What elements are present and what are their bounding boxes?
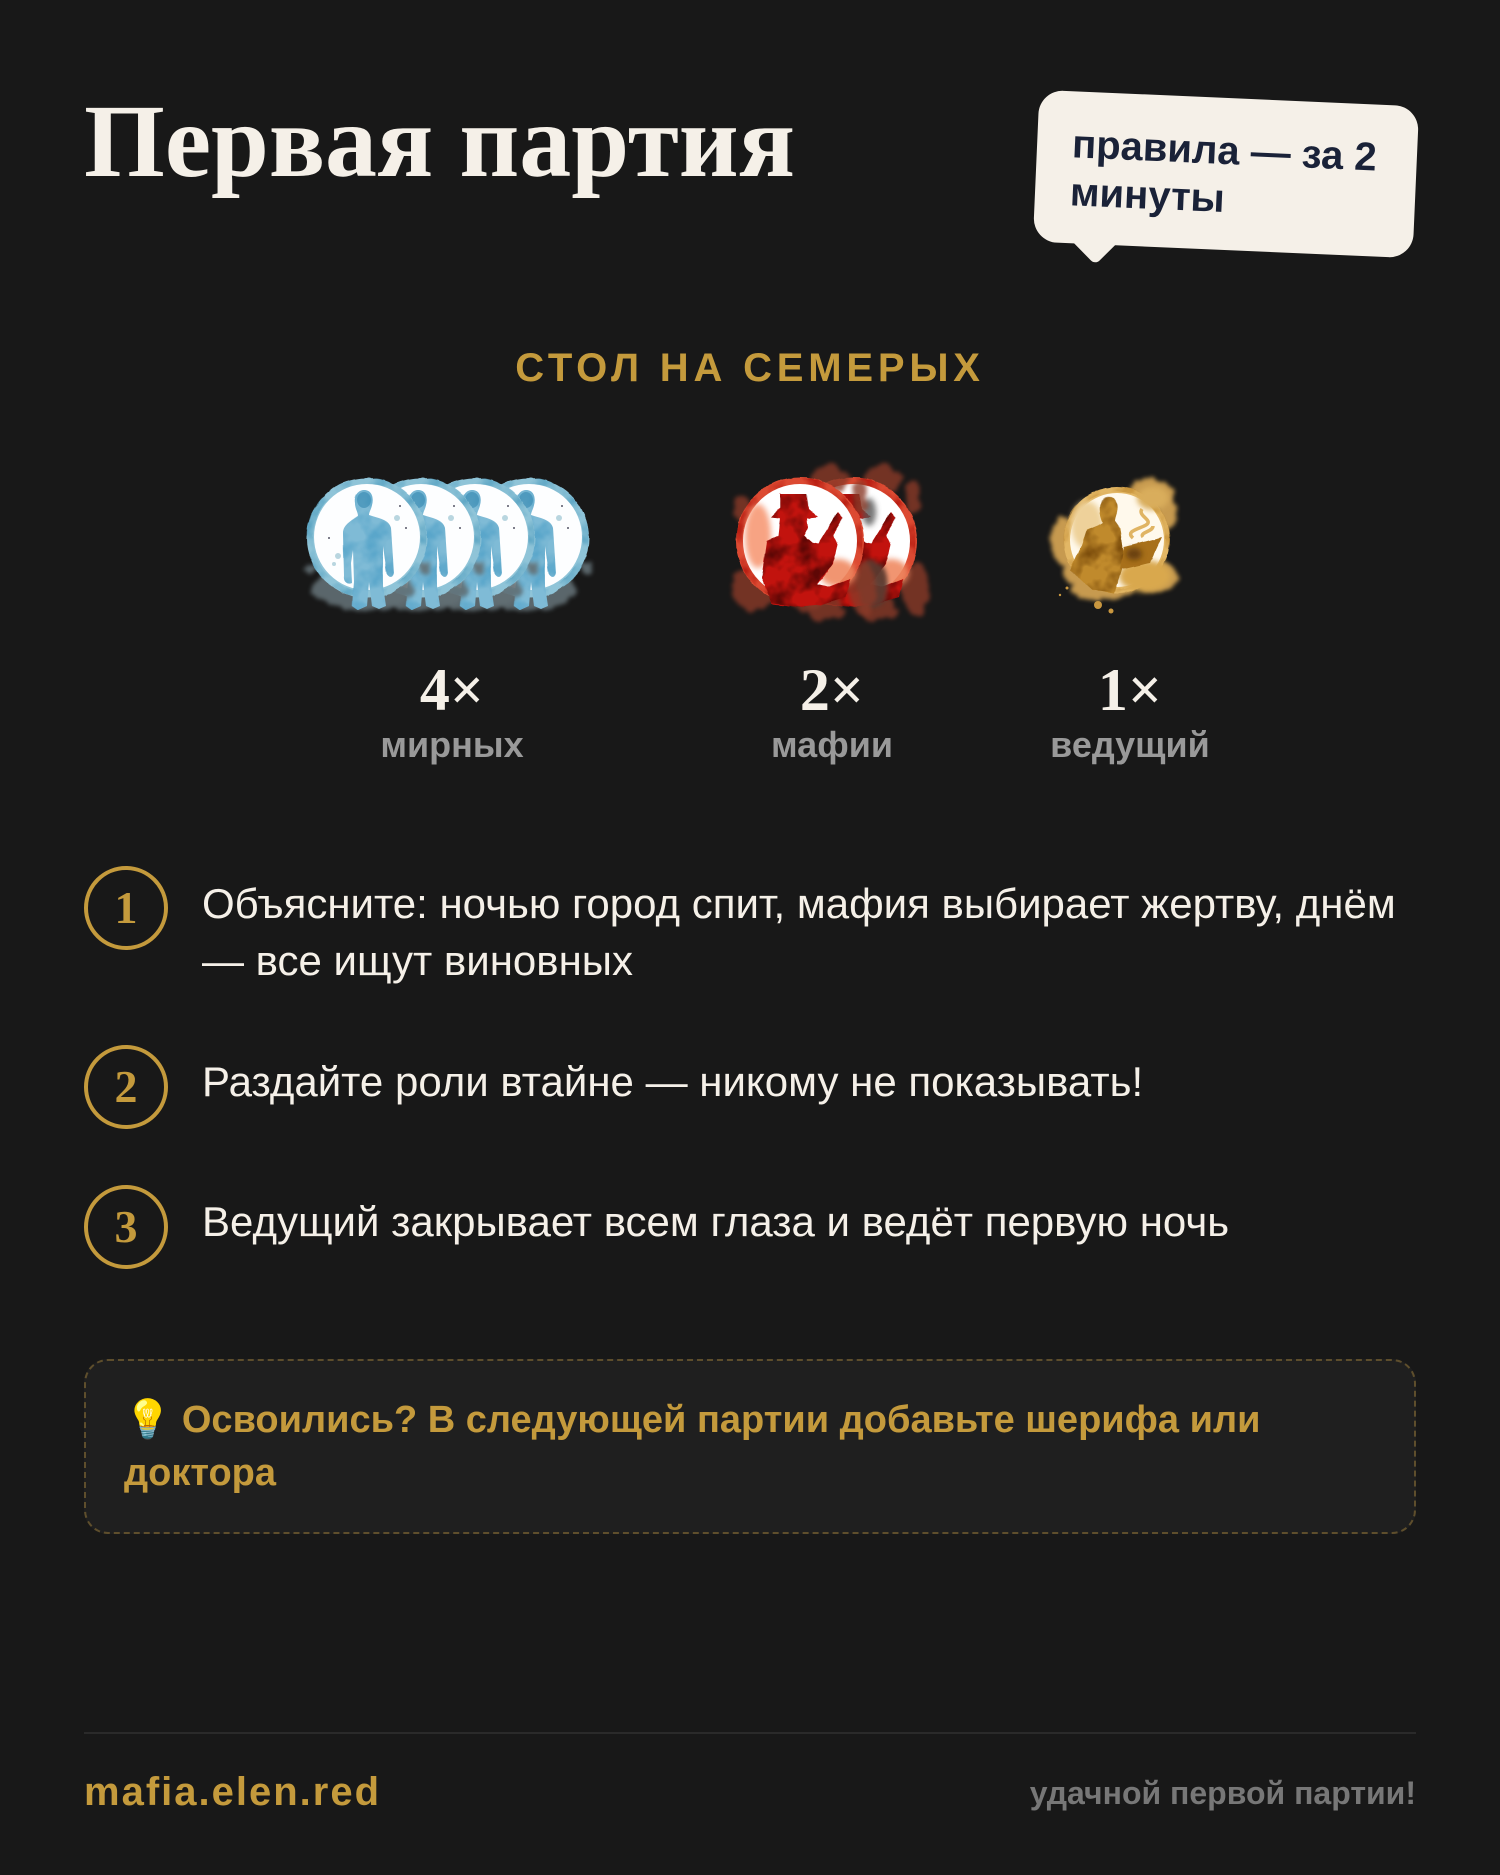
step number 2: 2 xyxy=(114,1061,138,1112)
token: host xyxy=(1051,478,1179,614)
step number 1 xyxy=(84,866,168,950)
speech bubble callout xyxy=(1033,90,1419,258)
step text 2: Раздайте роли втайне — никому не показывать! xyxy=(202,1058,1143,1105)
count: host: 1× xyxy=(1098,657,1162,723)
footer divider xyxy=(84,1732,1416,1734)
step number 2 xyxy=(84,1045,168,1129)
step number 1: 1 xyxy=(114,882,138,933)
count: host xyxy=(1050,657,1210,765)
step number 3: 3 xyxy=(114,1201,138,1252)
count: civilians xyxy=(380,657,524,765)
tip callout xyxy=(84,1359,1416,1534)
step text 3: Ведущий закрывает всем глаза и ведёт первую ночь xyxy=(202,1198,1229,1245)
token: civilians xyxy=(304,478,594,610)
count: mafia xyxy=(771,657,893,765)
count: mafia: мафии xyxy=(771,724,893,765)
step text 1: Объясните: ночью город спит, мафия выбирает жертву, днём — все ищут виновных xyxy=(202,880,1396,984)
tip callout: 💡 Освоились? В следующей партии добавьте шерифа или доктора xyxy=(124,1399,1260,1494)
footer site: mafia.elen.red xyxy=(84,1770,381,1814)
speech bubble callout: правила — за 2 минуты xyxy=(1069,122,1378,221)
token: mafia xyxy=(732,465,929,621)
role tokens xyxy=(302,460,1182,624)
count: civilians: мирных xyxy=(380,724,524,765)
section heading: СТОЛ НА СЕМЕРЫХ xyxy=(515,346,985,390)
step number 3 xyxy=(84,1185,168,1269)
count: host: ведущий xyxy=(1050,724,1210,765)
footer note: удачной первой партии! xyxy=(1030,1775,1416,1811)
title: Первая партия xyxy=(84,84,795,199)
count: civilians: 4× xyxy=(420,657,484,723)
count: mafia: 2× xyxy=(800,657,864,723)
